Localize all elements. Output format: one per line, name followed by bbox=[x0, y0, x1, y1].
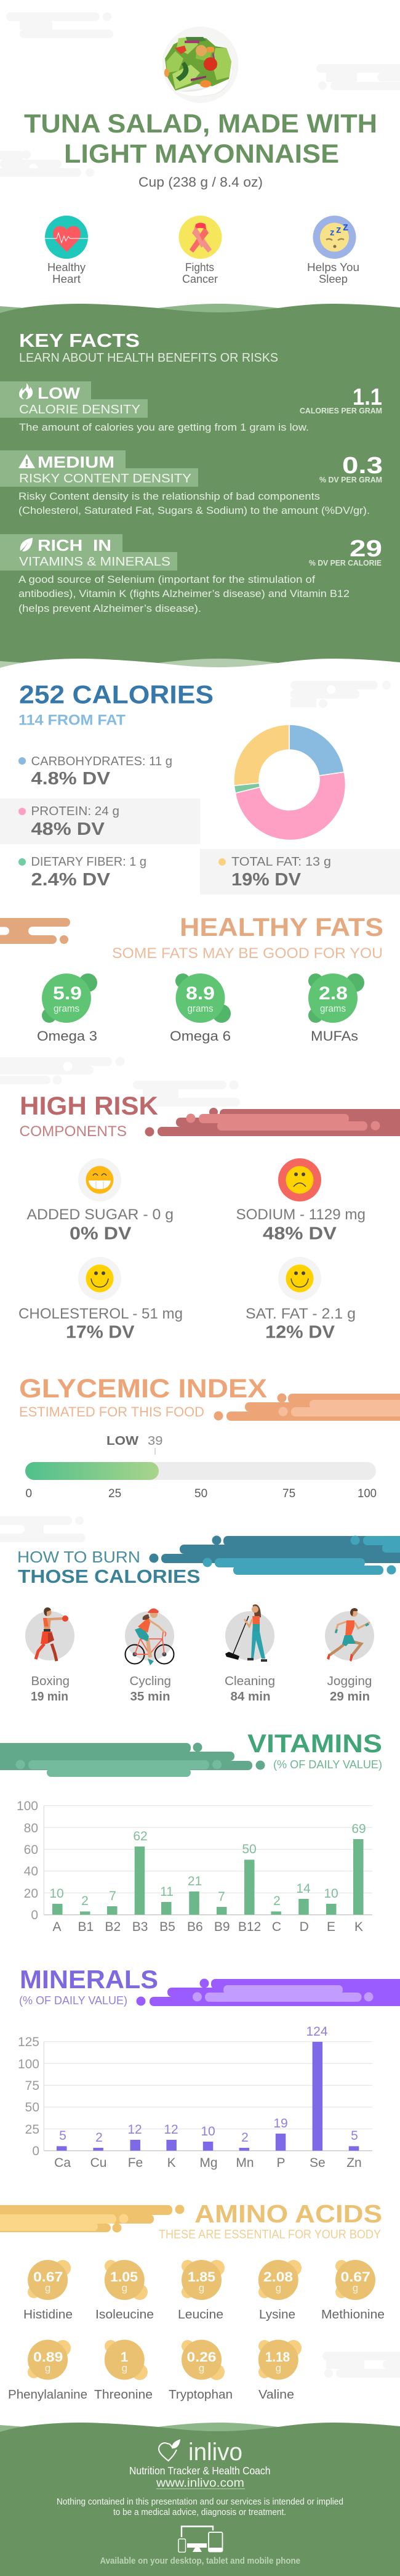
heading bbox=[19, 1965, 158, 2007]
bar chart: vitamins: 14 bbox=[296, 1882, 311, 1896]
amino: isoleucine: Isoleucine bbox=[95, 2308, 154, 2322]
panel: minerals bbox=[18, 1965, 400, 2170]
bar chart: minerals: 19 bbox=[273, 2116, 288, 2131]
gauge: 50 bbox=[194, 1487, 207, 1500]
heading: MINERALS bbox=[20, 1965, 158, 1994]
gauge: 25 bbox=[108, 1487, 121, 1500]
legend: protein bbox=[0, 798, 201, 844]
heading bbox=[19, 1374, 267, 1420]
heading: LEARN ABOUT HEALTH BENEFITS OR RISKS bbox=[19, 351, 278, 365]
benefit: healthy heart: Heart bbox=[52, 273, 81, 285]
bar chart: minerals: Cu bbox=[90, 2156, 106, 2170]
bar chart: minerals: Fe bbox=[128, 2156, 143, 2170]
activity: cycling: 35 min bbox=[130, 1690, 170, 1704]
benefit: helps you sleep bbox=[307, 216, 359, 285]
bar chart: vitamins: E bbox=[327, 1920, 335, 1934]
amino: methionine: Methionine bbox=[321, 2308, 385, 2322]
fact: low calorie density: CALORIES PER GRAM bbox=[300, 407, 382, 415]
bar chart: minerals: 12 bbox=[164, 2123, 178, 2137]
bar chart: vitamins: 0 bbox=[31, 1908, 38, 1922]
bar chart: minerals: 2 bbox=[95, 2131, 103, 2145]
panel: calories bbox=[0, 680, 400, 895]
heading bbox=[18, 680, 214, 728]
bar chart: vitamins: B2 bbox=[105, 1920, 121, 1934]
bar chart: minerals: 10 bbox=[201, 2124, 215, 2139]
legend: carbohydrates: CARBOHYDRATES: 11 g bbox=[31, 755, 172, 768]
risk: cholesterol: 17% DV bbox=[66, 1322, 135, 1342]
fact: medium risky content density bbox=[0, 450, 383, 516]
activity: boxing: Boxing bbox=[31, 1675, 70, 1688]
legend: carbohydrates bbox=[18, 755, 172, 789]
tagline and url bbox=[129, 2464, 271, 2490]
benefit: helps you sleep: z bbox=[343, 221, 348, 233]
fact: rich in vitamins and minerals: antibodies), Vitamin K (fights Alzheimer’s disease) and Vitamin B12 bbox=[18, 588, 350, 599]
amino: lysine: Lysine bbox=[259, 2308, 295, 2322]
title: LIGHT MAYONNAISE bbox=[64, 139, 339, 169]
bar chart: minerals: 75 bbox=[25, 2079, 39, 2093]
tagline and url: Nutrition Tracker & Health Coach bbox=[129, 2464, 271, 2477]
risk: sodium: SODIUM - 1129 mg bbox=[236, 1206, 366, 1223]
panel: key facts bbox=[0, 304, 400, 678]
amino: phenylalanine: 0.89 bbox=[33, 2349, 63, 2365]
legend: dietary fiber: 2.4% DV bbox=[31, 870, 111, 890]
amino: tryptophan: 0.26 bbox=[187, 2349, 217, 2365]
amino: phenylalanine bbox=[8, 2340, 87, 2402]
amino: histidine bbox=[23, 2260, 73, 2322]
gauge: LOW bbox=[106, 1434, 138, 1448]
benefit: healthy heart bbox=[45, 216, 88, 285]
heading: THOSE CALORIES bbox=[18, 1566, 201, 1587]
disclaimer: Nothing contained in this presentation and our services is intended or implied bbox=[57, 2497, 343, 2507]
amino: phenylalanine: Phenylalanine bbox=[8, 2388, 87, 2402]
amino: threonine bbox=[94, 2340, 153, 2402]
decorative banner bbox=[149, 1535, 400, 1575]
heading: THESE ARE ESSENTIAL FOR YOUR BODY bbox=[159, 2228, 381, 2241]
heading: HEALTHY FATS bbox=[180, 912, 383, 941]
fact: rich in vitamins and minerals: % DV PER CALORIE bbox=[309, 559, 382, 567]
fact: low calorie density: 1.1 bbox=[353, 384, 382, 410]
amino: valine bbox=[258, 2340, 302, 2402]
bar chart: minerals: 2 bbox=[241, 2131, 249, 2145]
stat: omega 6: grams bbox=[187, 1004, 213, 1014]
amino: tryptophan bbox=[169, 2340, 233, 2402]
benefit: helps you sleep: z bbox=[330, 227, 335, 238]
heading bbox=[112, 912, 383, 962]
stat: omega 3 bbox=[37, 973, 97, 1044]
bar chart: minerals: 50 bbox=[25, 2100, 39, 2115]
amino: leucine: Leucine bbox=[178, 2308, 223, 2322]
bar chart: vitamins: 21 bbox=[188, 1874, 202, 1888]
panel: footer bbox=[0, 2423, 400, 2576]
risk: cholesterol bbox=[18, 1257, 183, 1342]
fact: rich in vitamins and minerals: A good source of Selenium (important for the stimulation of bbox=[18, 574, 315, 585]
amino: phenylalanine: g bbox=[45, 2362, 50, 2374]
decorative banner bbox=[0, 2204, 185, 2233]
amino: lysine: 2.08 bbox=[263, 2269, 293, 2285]
activity: jogging: 29 min bbox=[330, 1690, 370, 1704]
stat: omega 3: Omega 3 bbox=[37, 1028, 97, 1044]
bar chart: minerals: Mg bbox=[199, 2156, 218, 2170]
fact: rich in vitamins and minerals: 29 bbox=[350, 536, 382, 562]
gauge: 0 bbox=[26, 1487, 32, 1500]
fact: low calorie density: LOW bbox=[38, 384, 81, 402]
amino: lysine: g bbox=[276, 2282, 281, 2294]
icon: devices bbox=[178, 2526, 223, 2552]
benefit: helps you sleep: Helps You bbox=[307, 261, 359, 274]
bar chart: minerals: 100 bbox=[18, 2057, 39, 2071]
stat: MUFAs: 2.8 bbox=[319, 983, 348, 1004]
amino: threonine: g bbox=[122, 2362, 127, 2374]
bar chart: vitamins: 60 bbox=[24, 1843, 38, 1857]
risk: saturated fat: SAT. FAT - 2.1 g bbox=[246, 1306, 356, 1322]
gauge: 39 bbox=[148, 1434, 162, 1448]
decorative banner bbox=[0, 918, 70, 944]
heading bbox=[19, 330, 278, 365]
fact: low calorie density bbox=[0, 381, 382, 433]
bar chart: vitamins bbox=[17, 1799, 372, 1934]
bar chart: minerals bbox=[18, 2025, 372, 2170]
risk: added sugar: 0% DV bbox=[70, 1224, 132, 1243]
title: TUNA SALAD, MADE WITH bbox=[24, 109, 377, 139]
logo: inlivo bbox=[188, 2439, 242, 2466]
legend: protein: 48% DV bbox=[31, 819, 105, 839]
bar chart: vitamins: K bbox=[354, 1920, 363, 1934]
risk: cholesterol: CHOLESTEROL - 51 mg bbox=[18, 1306, 183, 1322]
bar chart: vitamins: 50 bbox=[242, 1842, 257, 1856]
bar chart: minerals: 5 bbox=[59, 2129, 66, 2143]
benefit: fights cancer: Cancer bbox=[182, 273, 218, 285]
fact: rich in vitamins and minerals bbox=[0, 534, 382, 614]
bar chart: vitamins: 62 bbox=[133, 1829, 148, 1843]
legend: total fat: TOTAL FAT: 13 g bbox=[231, 855, 331, 869]
bar chart: minerals: 125 bbox=[18, 2035, 39, 2049]
amino: tryptophan: g bbox=[199, 2362, 204, 2374]
fact: medium risky content density: (Cholesterol, Saturated Fat, Sugars & Sodium) to the amount (%DV/gr). bbox=[18, 505, 370, 516]
amino: leucine: 1.85 bbox=[188, 2269, 215, 2285]
legend: total fat: 19% DV bbox=[231, 870, 302, 890]
amino: leucine bbox=[178, 2260, 225, 2322]
availability note: Available on your desktop, tablet and mobile phone bbox=[100, 2556, 300, 2566]
header bbox=[24, 26, 377, 285]
bar chart: minerals: 25 bbox=[25, 2123, 39, 2137]
decorative banner bbox=[137, 1979, 400, 2006]
bar chart: vitamins: 7 bbox=[109, 1889, 116, 1903]
icon: flame bbox=[19, 383, 33, 399]
icon: leaf bbox=[20, 538, 33, 551]
amino: threonine: Threonine bbox=[94, 2388, 153, 2402]
stat: MUFAs: grams bbox=[320, 1004, 346, 1014]
tagline and url: www.inlivo.com bbox=[156, 2477, 244, 2490]
amino: valine: 1.18 bbox=[265, 2349, 290, 2365]
fact: medium risky content density: 0.3 bbox=[342, 453, 383, 479]
decorative banner bbox=[214, 1394, 400, 1421]
fact: medium risky content density: MEDIUM bbox=[38, 453, 114, 471]
amino: methionine: g bbox=[353, 2282, 358, 2294]
decorative banner bbox=[0, 1742, 265, 1777]
amino: methionine bbox=[321, 2260, 385, 2322]
gauge bbox=[25, 1434, 377, 1500]
heading: (% OF DAILY VALUE) bbox=[273, 1758, 382, 1771]
bar chart: vitamins: A bbox=[52, 1920, 62, 1934]
amino: valine: Valine bbox=[258, 2388, 294, 2402]
legend: dietary fiber: DIETARY FIBER: 1 g bbox=[31, 855, 146, 869]
bar chart: minerals: 0 bbox=[32, 2144, 39, 2158]
gauge: 75 bbox=[282, 1487, 295, 1500]
heading bbox=[17, 1548, 201, 1587]
bar chart: minerals: K bbox=[167, 2156, 176, 2170]
amino: isoleucine: 1.05 bbox=[110, 2269, 138, 2285]
fact: rich in vitamins and minerals: (helps prevent Alzheimer’s disease). bbox=[18, 603, 201, 614]
amino: isoleucine bbox=[95, 2260, 154, 2322]
legend: total fat bbox=[200, 849, 400, 895]
stat: omega 6: 8.9 bbox=[186, 983, 215, 1004]
bar chart: minerals: Se bbox=[310, 2156, 326, 2170]
heading: VITAMINS bbox=[247, 1729, 382, 1758]
legend: dietary fiber bbox=[18, 855, 146, 890]
heading bbox=[247, 1729, 382, 1771]
logo bbox=[159, 2439, 242, 2466]
heading: KEY FACTS bbox=[19, 330, 140, 351]
panel: amino acids bbox=[0, 2200, 385, 2402]
activity: cycling bbox=[125, 1608, 174, 1704]
stat: MUFAs bbox=[308, 973, 364, 1044]
serving size: Cup (238 g / 8.4 oz) bbox=[138, 174, 263, 190]
donut chart bbox=[234, 725, 345, 840]
bar chart: minerals: Ca bbox=[54, 2156, 71, 2170]
stat: omega 3: grams bbox=[54, 1004, 79, 1014]
bar chart: vitamins: B9 bbox=[214, 1920, 230, 1934]
bar chart: vitamins: B12 bbox=[238, 1920, 261, 1934]
benefit: healthy heart: Healthy bbox=[47, 261, 86, 274]
bar chart: vitamins: C bbox=[272, 1920, 281, 1934]
food photo: salad bowl bbox=[162, 26, 239, 103]
heading: AMINO ACIDS bbox=[194, 2200, 382, 2228]
heading bbox=[20, 1091, 158, 1140]
fact: medium risky content density: % DV PER GRAM bbox=[319, 476, 382, 484]
amino: histidine: 0.67 bbox=[33, 2269, 63, 2285]
bar chart: vitamins: D bbox=[300, 1920, 309, 1934]
stat: omega 6: Omega 6 bbox=[170, 1028, 231, 1044]
activity: cleaning: Cleaning bbox=[225, 1675, 275, 1688]
disclaimer: to be a medical advice, diagnosis or treatment. bbox=[113, 2508, 286, 2517]
title bbox=[24, 109, 377, 169]
bar chart: vitamins: 100 bbox=[17, 1799, 38, 1813]
gauge: 100 bbox=[358, 1487, 377, 1500]
activity: cleaning: 84 min bbox=[230, 1690, 271, 1704]
heading bbox=[159, 2200, 382, 2241]
risk: added sugar: ADDED SUGAR - 0 g bbox=[27, 1206, 174, 1223]
fact: medium risky content density: Risky Content density is the relationship of bad components bbox=[18, 490, 320, 502]
activity: jogging: Jogging bbox=[327, 1675, 372, 1688]
bar chart: minerals: Zn bbox=[346, 2156, 362, 2170]
activity: cycling: Cycling bbox=[129, 1675, 171, 1688]
disclaimer bbox=[57, 2497, 343, 2517]
risk: sodium: 48% DV bbox=[263, 1224, 337, 1243]
stat: omega 6 bbox=[170, 973, 231, 1044]
heading: COMPONENTS bbox=[20, 1123, 127, 1140]
amino: histidine: g bbox=[45, 2282, 50, 2294]
heading: (% OF DAILY VALUE) bbox=[19, 1994, 127, 2007]
bar chart: minerals: 12 bbox=[127, 2123, 142, 2137]
icon: warning triangle bbox=[18, 454, 35, 468]
bar chart: minerals: 124 bbox=[306, 2025, 328, 2039]
fact: rich in vitamins and minerals: VITAMINS & MINERALS bbox=[19, 555, 170, 569]
panel: glycemic index bbox=[19, 1374, 400, 1500]
bar chart: vitamins: 10 bbox=[324, 1887, 338, 1901]
fact: rich in vitamins and minerals: RICH IN bbox=[38, 536, 111, 555]
heading: GLYCEMIC INDEX bbox=[19, 1374, 267, 1404]
panel: vitamins bbox=[0, 1729, 382, 1934]
amino: isoleucine: g bbox=[122, 2282, 127, 2294]
heading: HIGH RISK bbox=[20, 1091, 158, 1120]
stat: MUFAs: MUFAs bbox=[311, 1028, 358, 1044]
amino: lysine bbox=[258, 2260, 302, 2322]
amino: leucine: g bbox=[199, 2282, 204, 2294]
bar chart: vitamins: 10 bbox=[49, 1887, 64, 1901]
heading: 114 FROM FAT bbox=[18, 712, 126, 728]
benefit: helps you sleep: Sleep bbox=[319, 273, 348, 285]
amino: histidine: Histidine bbox=[23, 2308, 73, 2322]
benefit: fights cancer: Fights bbox=[185, 261, 214, 274]
activity: boxing: 19 min bbox=[31, 1690, 68, 1704]
bar chart: vitamins: B3 bbox=[132, 1920, 148, 1934]
bar chart: vitamins: 20 bbox=[24, 1887, 38, 1901]
amino: tryptophan: Tryptophan bbox=[169, 2388, 233, 2402]
bar chart: vitamins: 40 bbox=[24, 1864, 38, 1879]
decorative banner bbox=[145, 1108, 400, 1136]
panel: healthy fats bbox=[0, 912, 383, 1044]
stat: omega 3: 5.9 bbox=[53, 983, 82, 1004]
bar chart: vitamins: 2 bbox=[81, 1894, 89, 1908]
heading: HOW TO BURN bbox=[17, 1548, 140, 1566]
bar chart: vitamins: B6 bbox=[187, 1920, 203, 1934]
activity: boxing bbox=[25, 1607, 74, 1704]
risk: saturated fat bbox=[246, 1257, 356, 1342]
bar chart: vitamins: 80 bbox=[24, 1821, 38, 1835]
bar chart: vitamins: 69 bbox=[351, 1822, 366, 1836]
legend: carbohydrates: 4.8% DV bbox=[31, 769, 111, 789]
panel: high risk components bbox=[18, 1091, 400, 1342]
bar chart: minerals: 5 bbox=[351, 2129, 358, 2143]
fact: low calorie density: The amount of calories you are getting from 1 gram is low. bbox=[19, 421, 309, 433]
bar chart: vitamins: 2 bbox=[273, 1894, 281, 1908]
fact: low calorie density: CALORIE DENSITY bbox=[19, 402, 140, 416]
heading: ESTIMATED FOR THIS FOOD bbox=[19, 1404, 204, 1420]
amino: threonine: 1 bbox=[121, 2349, 128, 2365]
panel: how to burn those calories bbox=[17, 1535, 400, 1704]
heading: 252 CALORIES bbox=[19, 680, 214, 709]
activity: cleaning bbox=[225, 1604, 275, 1704]
risk: saturated fat: 12% DV bbox=[265, 1322, 335, 1342]
heading: SOME FATS MAY BE GOOD FOR YOU bbox=[112, 945, 383, 962]
bar chart: vitamins: 11 bbox=[160, 1885, 174, 1899]
bar chart: vitamins: B5 bbox=[159, 1920, 175, 1934]
bar chart: minerals: P bbox=[276, 2156, 286, 2170]
bar chart: vitamins: 7 bbox=[218, 1890, 225, 1904]
risk: sodium bbox=[236, 1158, 366, 1243]
activity: jogging bbox=[325, 1608, 374, 1704]
legend: protein: PROTEIN: 24 g bbox=[31, 805, 119, 818]
benefit: fights cancer bbox=[178, 216, 222, 285]
risk: added sugar bbox=[27, 1158, 174, 1243]
amino: methionine: 0.67 bbox=[341, 2269, 370, 2285]
benefit: helps you sleep: z bbox=[336, 224, 341, 235]
bar chart: vitamins: B1 bbox=[78, 1920, 94, 1934]
bar chart: minerals: Mn bbox=[236, 2156, 254, 2170]
amino: valine: g bbox=[276, 2362, 281, 2374]
fact: medium risky content density: RISKY CONTENT DENSITY bbox=[19, 471, 191, 486]
